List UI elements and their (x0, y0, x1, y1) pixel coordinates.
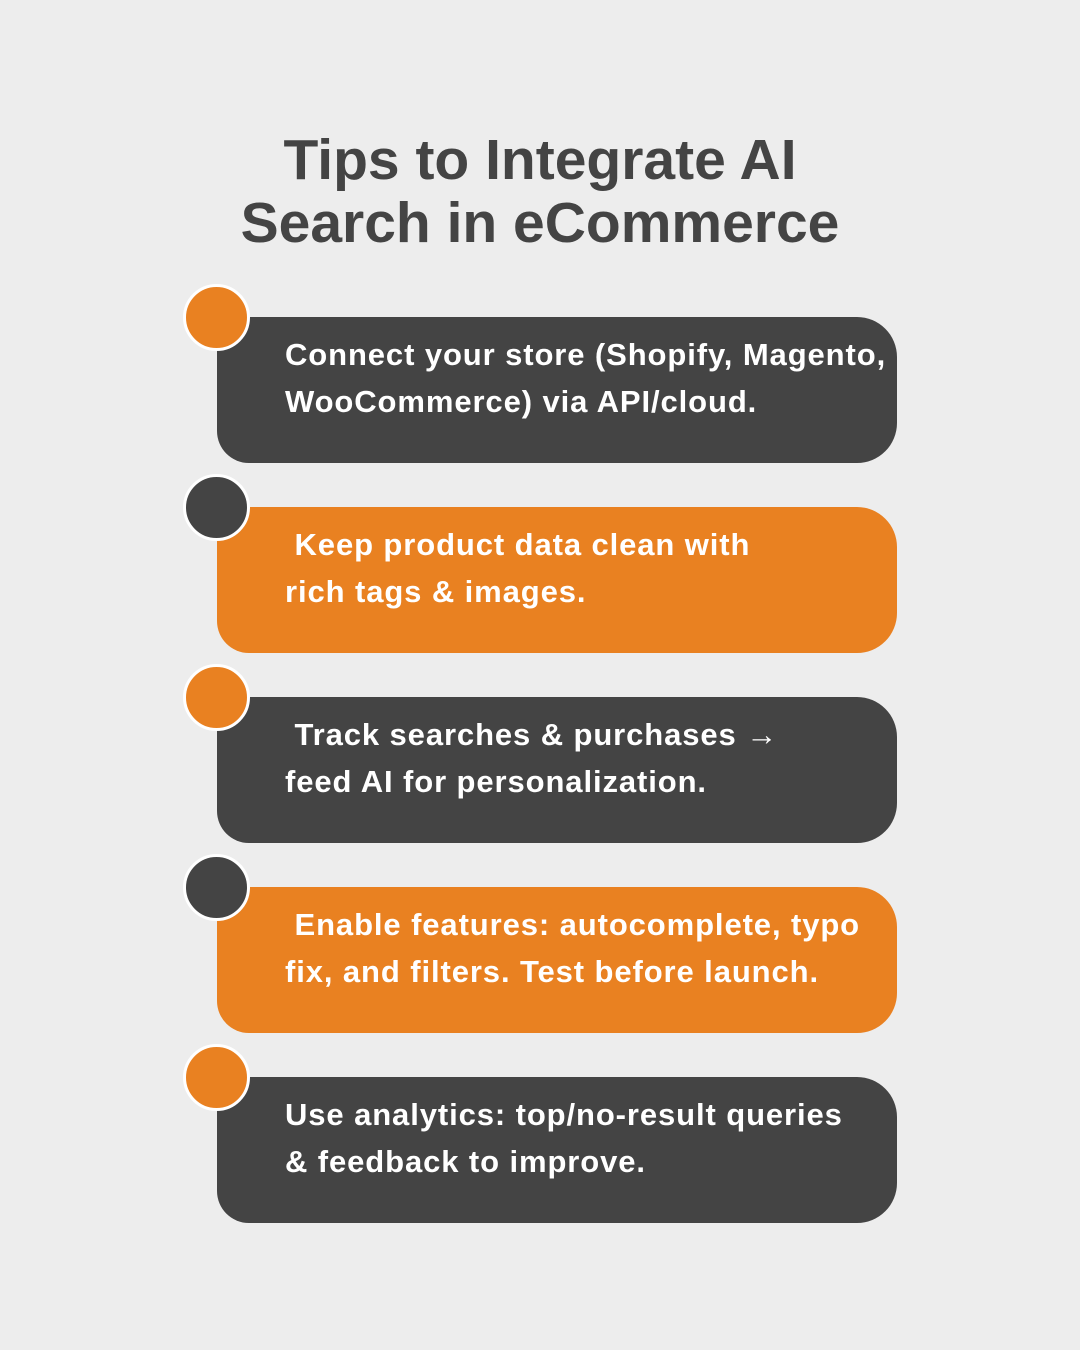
card 2 (217, 507, 897, 653)
card 2: Keep product data clean with (294, 527, 750, 562)
card 1 (217, 317, 897, 463)
card 3: feed AI for personalization. (285, 764, 707, 799)
icon: dot 4 (183, 854, 250, 921)
title: Tips to Integrate AI (283, 128, 797, 192)
icon: dot 3 (183, 664, 250, 731)
card 2: rich tags & images. (285, 574, 586, 609)
icon: dot 1 (183, 284, 250, 351)
card 1: Connect your store (Shopify, Magento, (285, 337, 886, 372)
card 3 (217, 697, 897, 843)
card 3: Track searches & purchases → (294, 717, 778, 752)
title (241, 128, 839, 255)
card 1: WooCommerce) via API/cloud. (285, 384, 757, 419)
card 5 (217, 1077, 897, 1223)
icon: dot 5 (183, 1044, 250, 1111)
card 4 (217, 887, 897, 1033)
card 5: & feedback to improve. (285, 1144, 646, 1179)
title: Search in eCommerce (241, 191, 839, 255)
card 4: Enable features: autocomplete, typo (294, 907, 860, 942)
icon: dot 2 (183, 474, 250, 541)
card 4: fix, and filters. Test before launch. (285, 954, 819, 989)
card 5: Use analytics: top/no-result queries (285, 1097, 843, 1132)
